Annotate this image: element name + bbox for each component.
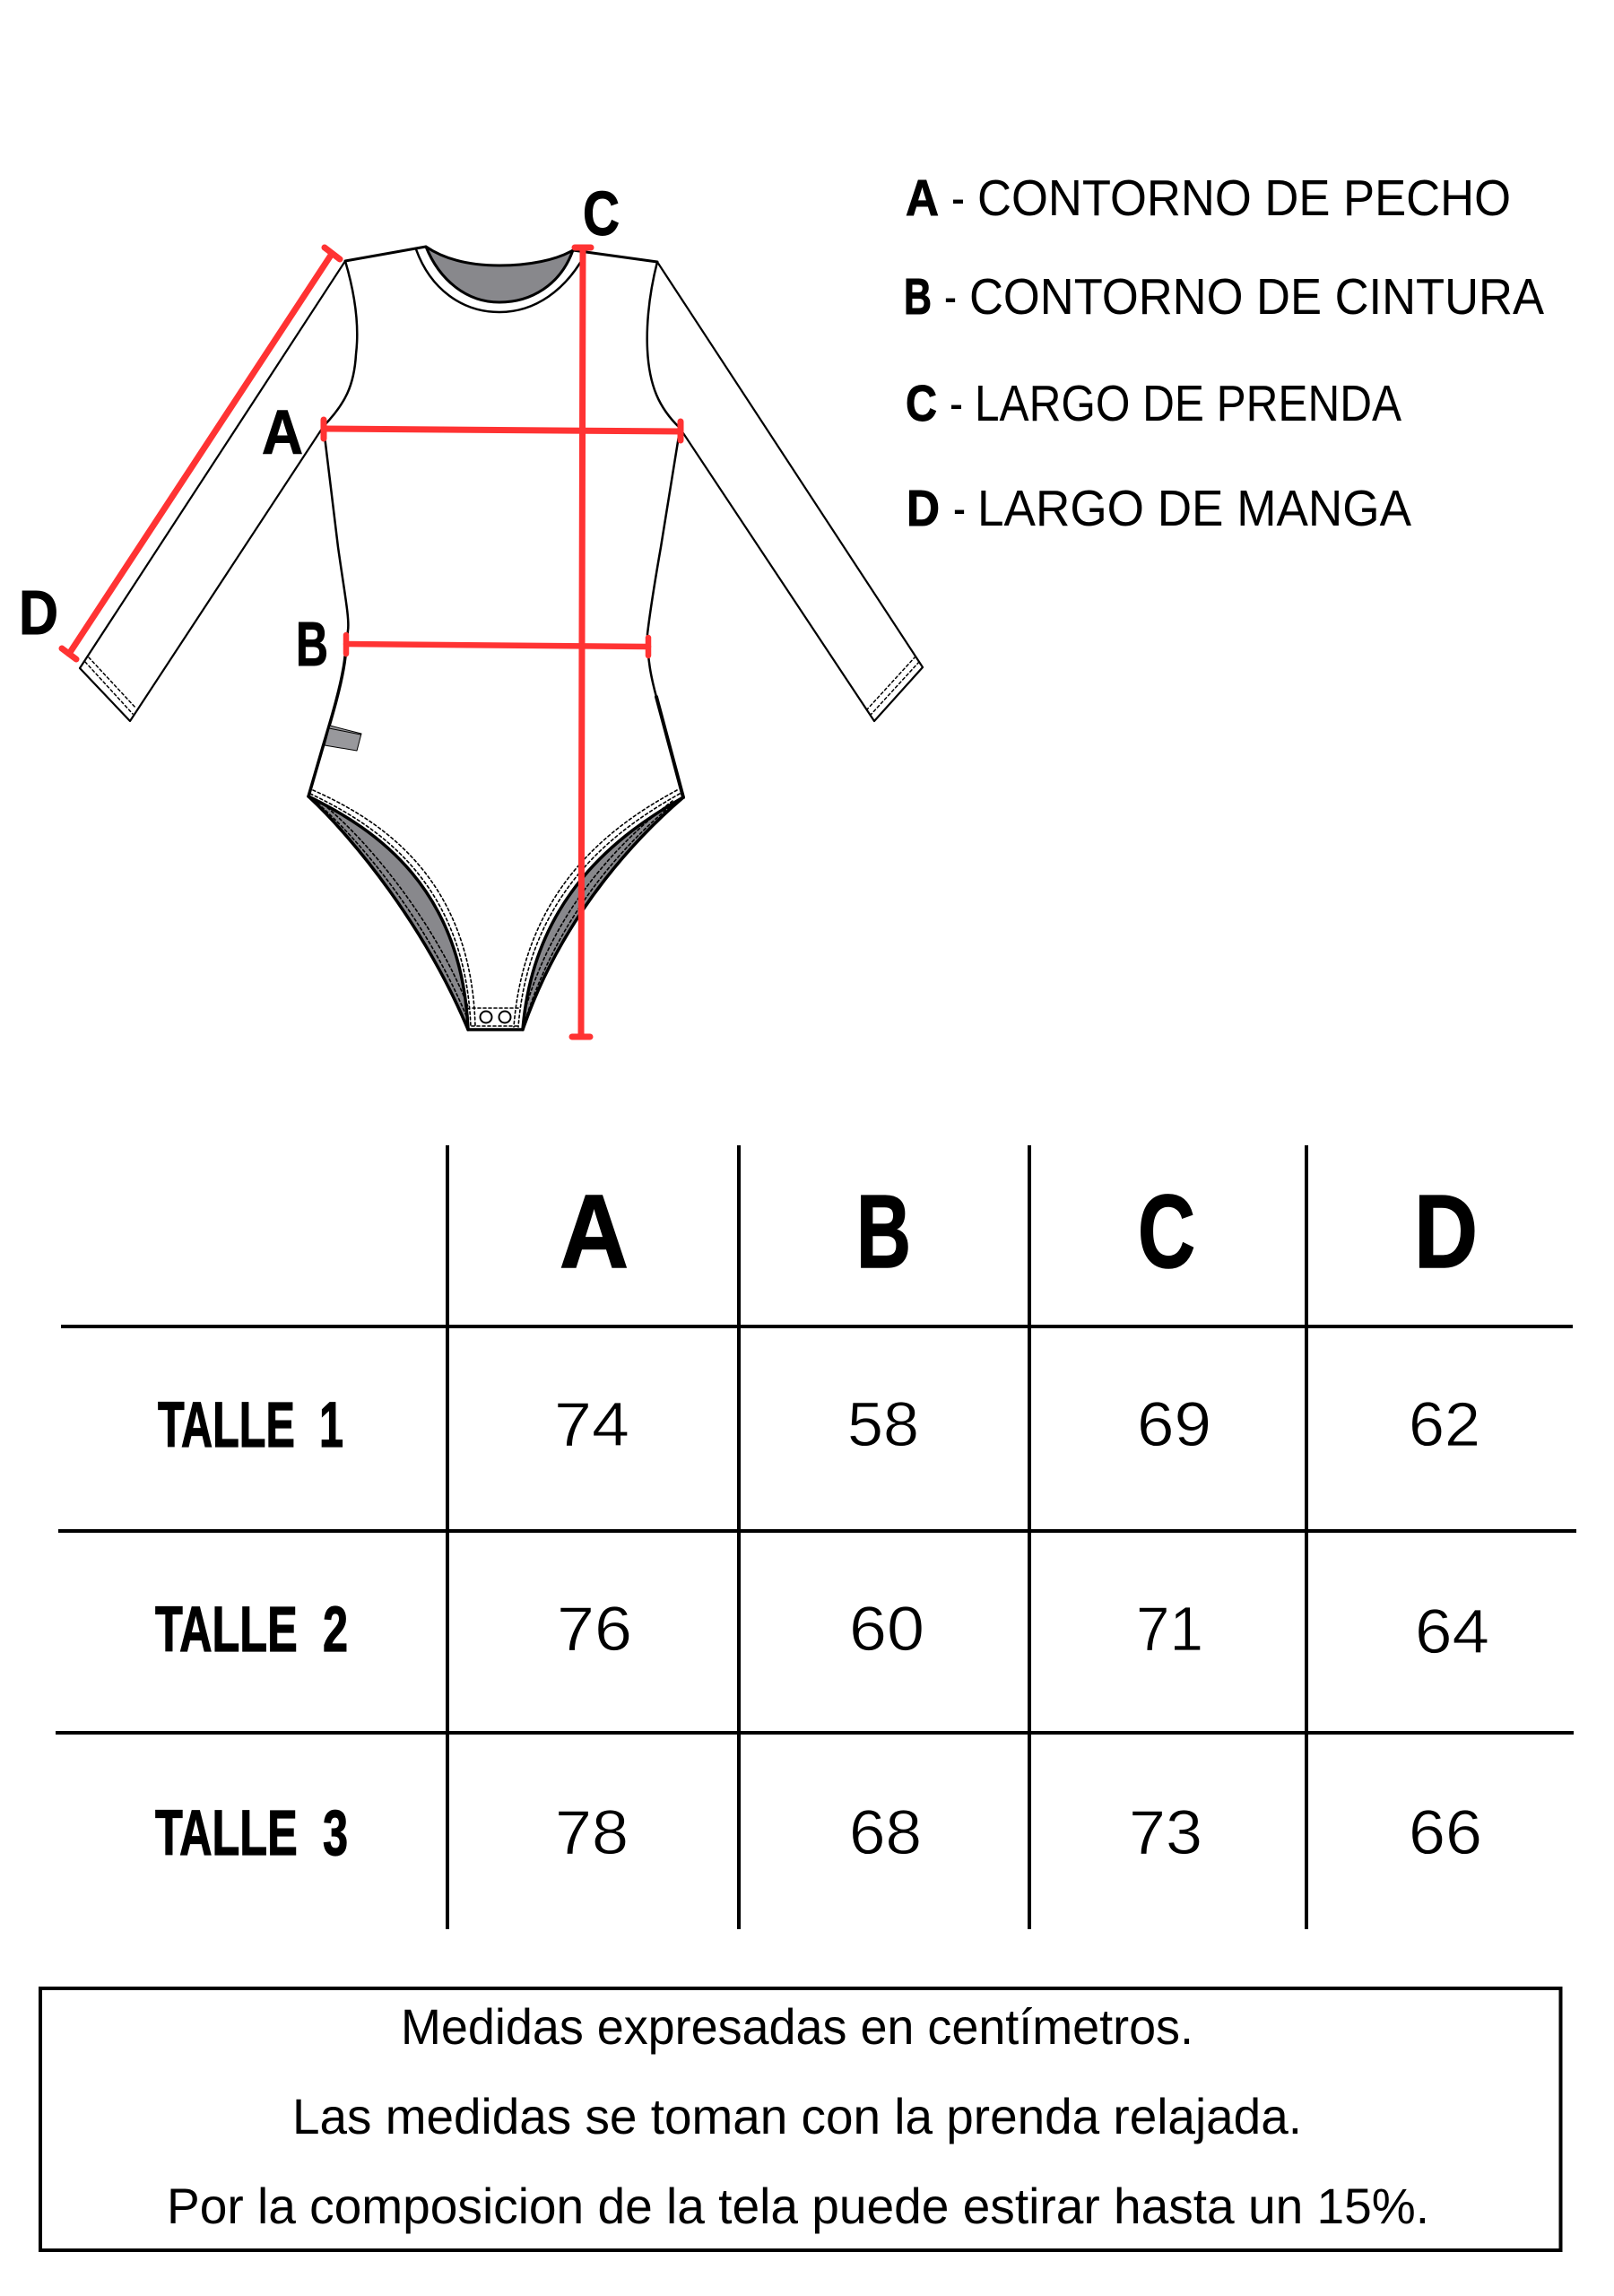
table values: 66 — [1409, 1797, 1482, 1867]
notes box — [40, 1988, 1560, 2250]
crotch snaps — [468, 1008, 523, 1030]
legend item B: CONTORNO DE CINTURA — [969, 268, 1544, 326]
table row labels: TALLE 1 — [158, 1390, 343, 1461]
note line 3: Por la composicion de la tela puede estirar hasta un 15%. — [167, 2178, 1429, 2234]
legend — [904, 170, 1544, 537]
side label tag — [325, 726, 361, 751]
measure B: waist — [346, 635, 648, 656]
legend item D: LARGO DE MANGA — [977, 480, 1411, 537]
table column headers: C — [1138, 1173, 1195, 1290]
label B: B — [296, 609, 328, 679]
label A: A — [262, 397, 303, 467]
measure C: garment length — [572, 248, 591, 1037]
red measurement lines — [62, 248, 681, 1037]
table column headers — [560, 1173, 1478, 1290]
legend item C: C — [906, 375, 937, 432]
table values: 58 — [847, 1389, 919, 1459]
left sleeve — [80, 261, 345, 721]
measure D: sleeve length — [62, 248, 340, 659]
legend item A: CONTORNO DE PECHO — [977, 170, 1511, 227]
table values: 73 — [1129, 1797, 1202, 1867]
bodysuit technical drawing — [80, 247, 923, 1030]
right leg opening — [514, 790, 683, 1030]
table values: 64 — [1415, 1596, 1489, 1666]
table row labels: TALLE 2 — [155, 1595, 348, 1665]
label D: D — [19, 578, 58, 648]
size table — [56, 1145, 1576, 1929]
neckline — [416, 247, 580, 312]
table values: 74 — [554, 1389, 629, 1459]
table values — [554, 1389, 1489, 1867]
legend item A: A — [906, 170, 939, 227]
table row labels — [155, 1390, 348, 1869]
note line 2: Las medidas se toman con la prenda relajada. — [292, 2088, 1302, 2144]
measure A: chest — [324, 420, 681, 440]
table values: 78 — [555, 1797, 629, 1867]
legend item B: - — [944, 268, 957, 326]
table values: 62 — [1409, 1389, 1480, 1459]
legend item A: - — [951, 170, 965, 227]
legend item C: - — [950, 375, 963, 432]
table column headers: D — [1414, 1173, 1478, 1290]
note line 1: Medidas expresadas en centímetros. — [401, 1998, 1193, 2055]
legend item D: D — [907, 480, 940, 537]
torso outline — [308, 247, 683, 797]
table column headers: B — [856, 1173, 911, 1290]
right sleeve — [657, 262, 923, 721]
table values: 76 — [557, 1594, 632, 1664]
legend item C: LARGO DE PRENDA — [975, 375, 1401, 432]
legend item D: - — [953, 480, 966, 537]
left leg opening — [308, 790, 475, 1030]
table column headers: A — [560, 1173, 629, 1290]
legend item B: B — [904, 268, 932, 326]
label C: C — [583, 178, 620, 248]
table values: 68 — [849, 1797, 922, 1867]
table row labels: TALLE 3 — [155, 1798, 348, 1869]
table values: 69 — [1137, 1389, 1211, 1459]
table values: 60 — [849, 1594, 924, 1664]
drawing letter labels — [19, 178, 620, 679]
table values: 71 — [1136, 1594, 1203, 1664]
